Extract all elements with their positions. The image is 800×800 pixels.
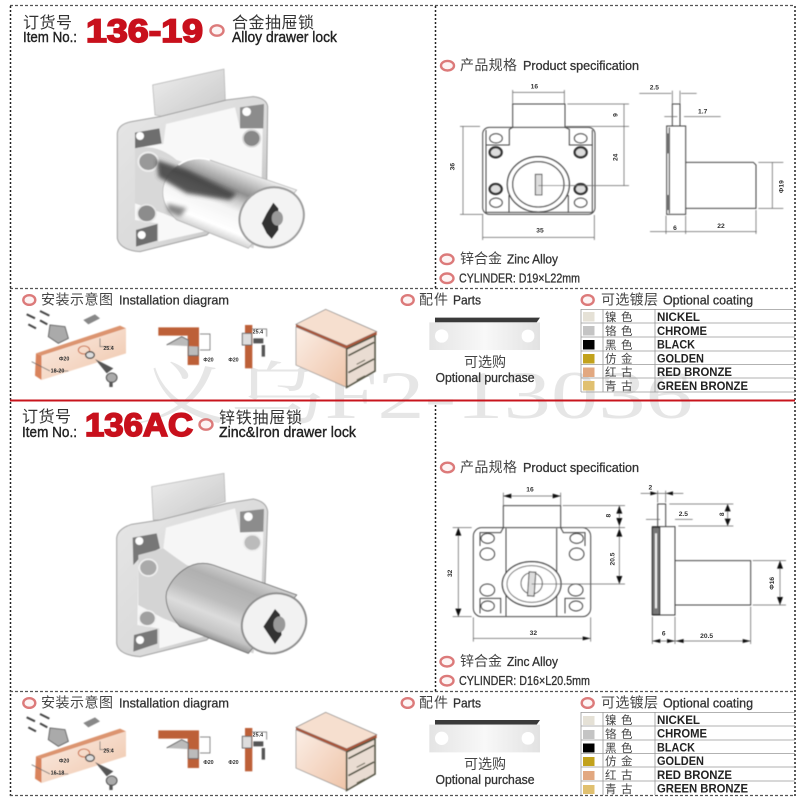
coating table: 铬色 bbox=[605, 727, 637, 741]
product photo: alloy drawer lock bbox=[117, 69, 314, 258]
coating table: 红古 bbox=[605, 768, 637, 782]
coating table: 黑色 bbox=[605, 741, 637, 755]
technical drawing: front view, 35 x 36: 16 bbox=[531, 84, 538, 91]
material: zinc alloy: Zinc Alloy bbox=[507, 252, 558, 266]
installation drawings: Φ20 bbox=[228, 760, 239, 766]
technical drawing: front view, 32 x 32: 6 bbox=[662, 631, 666, 638]
coating table: 仿金 bbox=[605, 352, 637, 366]
coating table: CHROME bbox=[657, 326, 707, 338]
coating table: GOLDEN bbox=[657, 354, 704, 366]
heading: item number 136AC: 136AC bbox=[85, 407, 193, 443]
coating table: GOLDEN bbox=[657, 756, 704, 768]
coating table: 铬色 bbox=[605, 324, 637, 338]
heading: product specification: Product specification bbox=[523, 58, 639, 73]
heading: item number 136-19: 订货号 bbox=[23, 14, 72, 32]
technical drawing: front view, 35 x 36: 24 bbox=[612, 153, 619, 161]
heading: installation diagram: 安装示意图 bbox=[41, 694, 113, 710]
coating table: 青古 bbox=[605, 379, 637, 393]
heading: item number 136-19: Alloy drawer lock bbox=[232, 29, 337, 46]
heading: item number 136AC: 订货号 bbox=[22, 408, 71, 426]
technical drawing: front view, 35 x 36 bbox=[449, 84, 786, 240]
heading: product specification bbox=[441, 459, 639, 475]
heading: parts: 配件 bbox=[419, 292, 448, 308]
icon: strike plate bbox=[429, 720, 540, 752]
panel: product specification 136-19 bbox=[440, 57, 786, 286]
heading: optional coating: Optional coating bbox=[663, 292, 753, 308]
heading: product specification: Product specification bbox=[523, 460, 639, 475]
panel: product specification 136AC bbox=[440, 459, 786, 688]
heading: optional coating bbox=[582, 292, 753, 308]
heading: parts bbox=[402, 694, 481, 710]
product photo: zinc and iron drawer lock bbox=[117, 473, 316, 664]
panel: optional coating 136AC bbox=[581, 694, 795, 796]
heading: installation diagram: Installation diagram bbox=[119, 292, 229, 308]
technical drawing: front view, 35 x 36: 35 bbox=[536, 228, 544, 235]
coating table: 黑色 bbox=[605, 338, 637, 352]
technical drawing: front view, 35 x 36: 6 bbox=[673, 225, 677, 232]
caption: optional purchase: Optional purchase bbox=[436, 772, 534, 787]
installation drawings: Φ20 bbox=[228, 358, 239, 364]
panel: installation diagram 136-19 bbox=[23, 292, 377, 387]
material: zinc alloy bbox=[440, 250, 558, 266]
material: zinc alloy: 锌合金 bbox=[460, 250, 502, 266]
installation drawings bbox=[27, 712, 377, 790]
heading: parts: 配件 bbox=[419, 694, 448, 710]
installation drawings: Φ20 bbox=[203, 760, 214, 766]
panel: item 136-19 bbox=[23, 13, 337, 258]
caption: optional purchase: 可选购 bbox=[464, 354, 506, 370]
coating table: RED BRONZE bbox=[657, 367, 732, 379]
coating table: GREEN BRONZE bbox=[657, 381, 748, 393]
installation drawings: 25.4 bbox=[253, 732, 263, 738]
heading: item number 136-19: 136-19 bbox=[86, 13, 203, 49]
panel: parts 136-19 bbox=[402, 292, 540, 385]
heading: product specification: 产品规格 bbox=[460, 459, 517, 475]
heading: installation diagram: 安装示意图 bbox=[41, 292, 113, 308]
technical drawing: front view, 35 x 36: 1.7 bbox=[698, 108, 708, 115]
technical drawing: front view, 35 x 36: 36 bbox=[449, 163, 456, 170]
watermark: 义乌F2-13036 bbox=[135, 357, 693, 433]
heading: item number 136-19: Item No.: bbox=[23, 29, 77, 46]
heading: optional coating: 可选镀层 bbox=[601, 292, 658, 308]
installation drawings bbox=[27, 309, 377, 387]
coating table: NICKEL bbox=[657, 715, 700, 727]
technical drawing: front view, 32 x 32: 2 bbox=[648, 484, 652, 491]
technical drawing: front view, 32 x 32: Φ16 bbox=[769, 577, 776, 590]
caption: optional purchase bbox=[436, 354, 534, 385]
heading: parts: Parts bbox=[453, 696, 481, 710]
heading: optional coating bbox=[582, 694, 753, 710]
coating table: RED BRONZE bbox=[657, 770, 732, 782]
coating table: BLACK bbox=[657, 742, 696, 754]
installation drawings: 25.4 bbox=[103, 346, 114, 352]
heading: item number 136AC: Item No.: bbox=[22, 424, 77, 441]
technical drawing: front view, 32 x 32: 16 bbox=[526, 486, 534, 493]
heading: installation diagram bbox=[23, 694, 229, 710]
coating table: 镍色 bbox=[605, 713, 637, 727]
coating table: GREEN BRONZE bbox=[657, 784, 748, 796]
technical drawing: front view, 32 x 32: 2.5 bbox=[679, 511, 688, 518]
panel: optional coating 136-19 bbox=[581, 292, 795, 393]
technical drawing: front view, 32 x 32: 32 bbox=[530, 630, 537, 637]
caption: optional purchase bbox=[436, 756, 534, 787]
technical drawing: front view, 32 x 32: 32 bbox=[447, 569, 454, 577]
installation drawings: 18-20 bbox=[51, 368, 64, 374]
coating table bbox=[581, 712, 795, 796]
installation drawings: 16-18 bbox=[51, 771, 64, 777]
heading: parts: Parts bbox=[453, 292, 481, 308]
coating table: 青古 bbox=[605, 782, 637, 796]
caption: optional purchase: Optional purchase bbox=[436, 370, 534, 385]
heading: installation diagram bbox=[23, 292, 229, 308]
heading: item number 136-19 bbox=[23, 13, 337, 49]
heading: item number 136AC bbox=[22, 407, 356, 443]
technical drawing: front view, 35 x 36: 2.5 bbox=[650, 84, 659, 91]
panel: installation diagram 136AC bbox=[23, 694, 377, 790]
heading: parts bbox=[402, 292, 481, 308]
coating table: 仿金 bbox=[605, 754, 637, 768]
cylinder size D19 x L22: CYLINDER: D19×L22mm bbox=[459, 270, 580, 286]
coating table: NICKEL bbox=[657, 312, 700, 324]
technical drawing: front view, 32 x 32 bbox=[447, 484, 786, 644]
technical drawing: front view, 32 x 32: 8 bbox=[719, 512, 726, 516]
coating table: BLACK bbox=[657, 340, 696, 352]
technical drawing: front view, 35 x 36: 22 bbox=[717, 223, 725, 230]
icon: strike plate bbox=[429, 318, 540, 350]
installation drawings: Φ20 bbox=[203, 358, 214, 364]
material: zinc alloy: Zinc Alloy bbox=[507, 654, 558, 669]
material: zinc alloy bbox=[440, 653, 558, 669]
panel: parts 136AC bbox=[402, 694, 540, 787]
heading: product specification bbox=[441, 57, 639, 73]
heading: item number 136AC: Zinc&Iron drawer lock bbox=[219, 424, 356, 441]
technical drawing: front view, 35 x 36: Φ19 bbox=[779, 180, 786, 193]
material: zinc alloy: 锌合金 bbox=[460, 653, 502, 669]
installation drawings: Φ20 bbox=[59, 356, 69, 362]
technical drawing: front view, 32 x 32: 20.5 bbox=[610, 552, 617, 565]
technical drawing: front view, 32 x 32: 8 bbox=[605, 514, 612, 518]
coating table: CHROME bbox=[657, 728, 707, 740]
heading: optional coating: 可选镀层 bbox=[601, 694, 658, 710]
installation drawings: Φ20 bbox=[59, 759, 69, 765]
installation drawings: 25.4 bbox=[253, 329, 263, 335]
cylinder size D16 x L20.5: CYLINDER: D16×L20.5mm bbox=[459, 673, 590, 688]
technical drawing: front view, 35 x 36: 9 bbox=[613, 113, 620, 117]
heading: item number 136-19: 合金抽屉锁 bbox=[232, 14, 314, 32]
coating table: 红古 bbox=[605, 365, 637, 379]
coating table bbox=[581, 309, 795, 393]
technical drawing: front view, 32 x 32: 20.5 bbox=[700, 633, 713, 640]
heading: optional coating: Optional coating bbox=[663, 696, 753, 710]
caption: optional purchase: 可选购 bbox=[464, 756, 506, 772]
coating table: 镍色 bbox=[605, 310, 637, 324]
panel: item 136AC bbox=[22, 407, 356, 664]
heading: product specification: 产品规格 bbox=[460, 57, 517, 73]
heading: item number 136AC: 锌铁抽屉锁 bbox=[219, 409, 302, 427]
heading: installation diagram: Installation diagram bbox=[119, 696, 229, 710]
installation drawings: 25.4 bbox=[103, 748, 114, 754]
